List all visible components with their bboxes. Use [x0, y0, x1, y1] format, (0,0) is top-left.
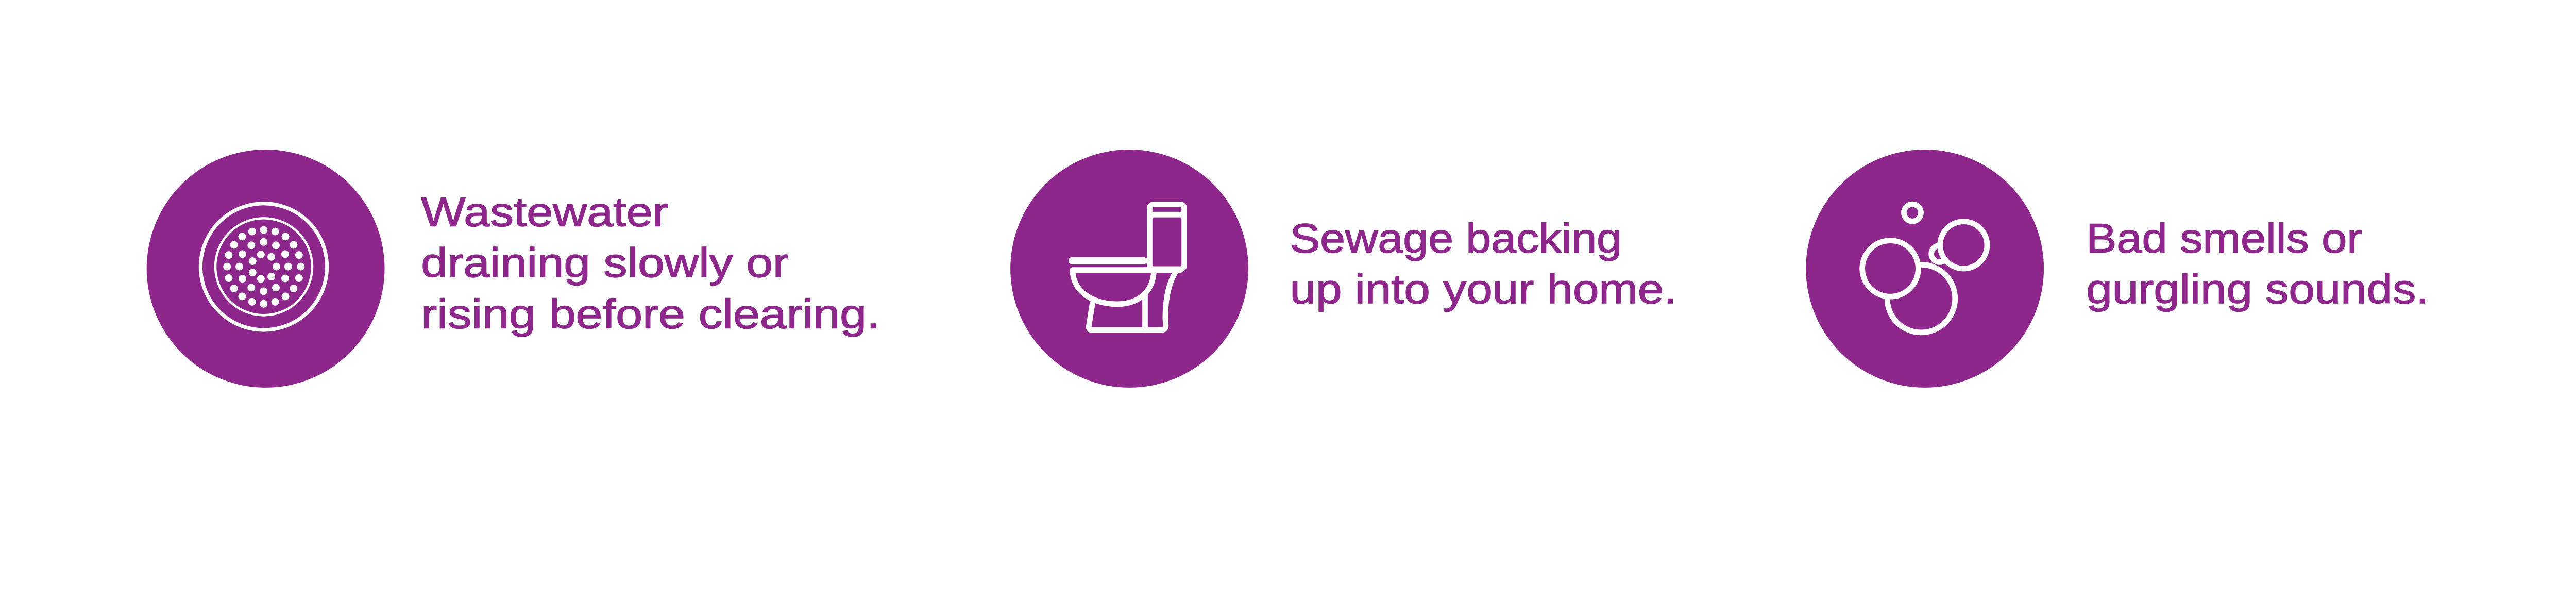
panel: bad smells [1806, 150, 2429, 388]
text: bad smells [2086, 215, 2429, 312]
text: slow draining [421, 189, 880, 337]
text: bad smells: gurgling sounds. [2086, 266, 2429, 312]
text: sewage backing up: up into your home. [1290, 266, 1677, 312]
text: slow draining: rising before clearing. [421, 291, 880, 337]
text: slow draining: Wastewater [421, 189, 668, 235]
text: sewage backing up: Sewage backing [1290, 215, 1622, 261]
icon: drain circle [147, 150, 385, 388]
text: slow draining: draining slowly or [421, 240, 789, 286]
text: bad smells: Bad smells or [2086, 215, 2362, 261]
panel: sewage backing up [1010, 150, 1677, 388]
icon: bubbles circle [1806, 150, 2044, 388]
icon: toilet circle [1010, 150, 1248, 388]
panel: slow draining [147, 150, 880, 388]
text: sewage backing up [1290, 215, 1677, 312]
